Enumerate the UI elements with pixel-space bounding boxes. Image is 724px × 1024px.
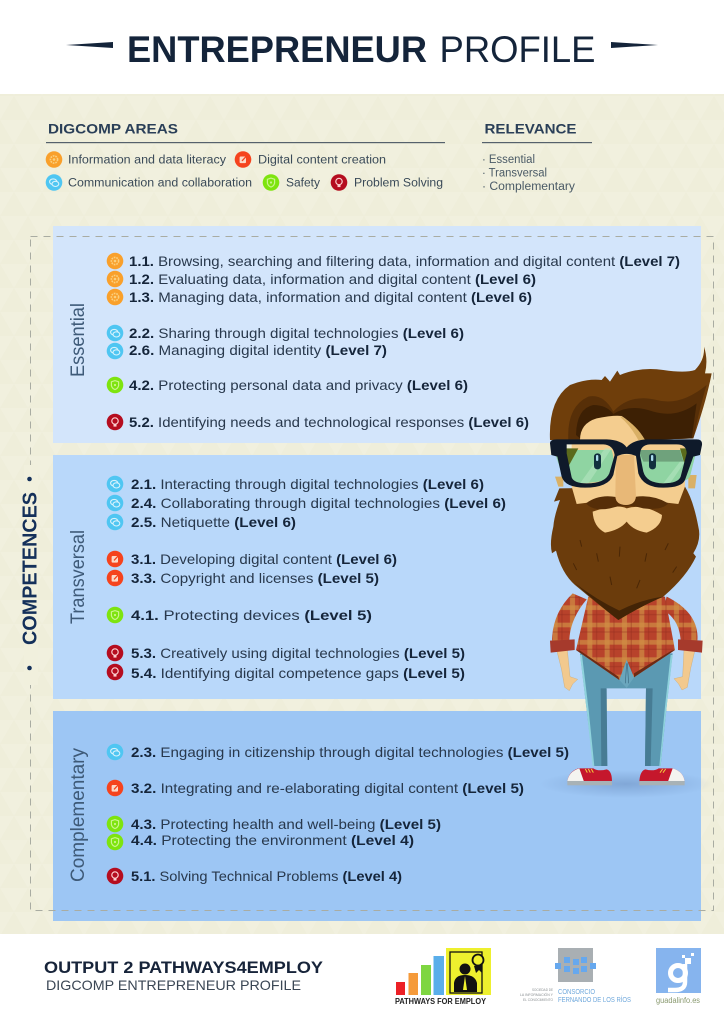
row 3.2: 3.2. Integrating and re-elaborating digital content (Level 5): [131, 780, 524, 796]
title: [66, 29, 658, 70]
footer text: OUTPUT 2 PATHWAYS4EMPLOY: [44, 959, 323, 977]
row 1.1: 1.1. Browsing, searching and filtering data, information and digital content (Level 7): [129, 253, 680, 269]
legend: relevance: · Essential: [482, 154, 535, 166]
row 4.1: 4.1. Protecting devices (Level 5): [131, 607, 372, 623]
row 4.3: 4.3. Protecting health and well-being (Level 5): [131, 816, 441, 832]
row 2.1: 2.1. Interacting through digital technologies (Level 6): [131, 476, 484, 492]
row 2.6: 2.6. Managing digital identity (Level 7): [129, 342, 387, 358]
logo: consorcio fernando de los rios: SOCIEDAD DE: [532, 988, 554, 992]
row 2.3: 2.3. Engaging in citizenship through digital technologies (Level 5): [131, 744, 569, 760]
icon: communication: [46, 174, 62, 191]
legend: DigComp areas: Problem Solving: [354, 178, 443, 190]
logo: pathways for employ: [395, 948, 491, 1006]
icon: content creation: [235, 151, 251, 168]
panel: complementary background: [53, 711, 701, 921]
footer band: [0, 934, 724, 1024]
row 5.1: 5.1. Solving Technical Problems (Level 4): [131, 868, 402, 884]
icon: problem solving: [331, 174, 347, 191]
panel: essential: [68, 253, 680, 430]
logo: consorcio fernando de los rios: [520, 948, 631, 1004]
panel: transversal: [68, 476, 506, 681]
row 3.3: 3.3. Copyright and licenses (Level 5): [131, 570, 379, 586]
transversal label: Transversal: [68, 530, 89, 624]
legend: DigComp areas: DIGCOMP AREAS: [48, 120, 178, 136]
row 2.2: 2.2. Sharing through digital technologies (Level 6): [129, 325, 464, 341]
footer text: [44, 959, 323, 993]
row 3.1: 3.1. Developing digital content (Level 6): [131, 551, 397, 567]
logo: pathways for employ: PATHWAYS FOR EMPLOY: [395, 997, 487, 1006]
icon: safety: [263, 174, 279, 191]
row 5.3: 5.3. Creatively using digital technologies (Level 5): [131, 645, 465, 661]
row 1.2: 1.2. Evaluating data, information and digital content (Level 6): [129, 271, 536, 287]
character body: [539, 593, 713, 798]
legend: relevance: · Transversal: [482, 168, 547, 180]
legend: DigComp areas: Digital content creation: [258, 154, 386, 166]
logo: consorcio fernando de los rios: FERNANDO DE LOS RÍOS: [558, 995, 631, 1004]
legend: DigComp areas: Safety: [286, 178, 320, 190]
row 2.4: 2.4. Collaborating through digital technologies (Level 6): [131, 495, 506, 511]
logo: consorcio fernando de los rios: EL CONOCIMIENTO: [523, 998, 553, 1002]
legend: relevance: · Complementary: [482, 181, 575, 193]
legend: relevance: RELEVANCE: [484, 120, 576, 136]
title: PROFILE: [440, 29, 596, 70]
row 2.5: 2.5. Netiquette (Level 6): [131, 514, 296, 530]
character: bearded entrepreneur: [539, 347, 713, 798]
legend: DigComp areas: Communication and collaboration: [68, 178, 252, 190]
row 4.2: 4.2. Protecting personal data and privacy (Level 6): [129, 377, 468, 393]
legend: relevance: [482, 120, 592, 193]
logo: guadalinfo: guadalinfo.es: [656, 996, 700, 1005]
legend: DigComp areas: [46, 120, 445, 191]
row 1.3: 1.3. Managing data, information and digital content (Level 6): [129, 289, 532, 305]
logo: consorcio fernando de los rios: CONSORCIO: [558, 987, 595, 996]
panel: essential background: [53, 226, 701, 443]
row 5.4: 5.4. Identifying digital competence gaps (Level 5): [131, 665, 465, 681]
panel: complementary: [68, 744, 569, 884]
row 4.4: 4.4. Protecting the environment (Level 4): [131, 832, 414, 848]
panel: transversal background: [53, 455, 701, 699]
row 5.2: 5.2. Identifying needs and technological responses (Level 6): [129, 414, 529, 430]
character head: [550, 347, 712, 620]
legend: DigComp areas: Information and data literacy: [68, 154, 226, 166]
essential label: Essential: [68, 303, 89, 377]
footer text: DIGCOMP ENTREPRENEUR PROFILE: [46, 977, 301, 993]
complementary label: Complementary: [68, 748, 89, 882]
icon: information: [46, 151, 62, 168]
logo: consorcio fernando de los rios: LA INFORMACIÓN Y: [520, 992, 554, 997]
logo: guadalinfo: [656, 948, 701, 1005]
title: ENTREPRENEUR: [127, 29, 427, 70]
competences side label: COMPETENCES: [20, 492, 42, 645]
